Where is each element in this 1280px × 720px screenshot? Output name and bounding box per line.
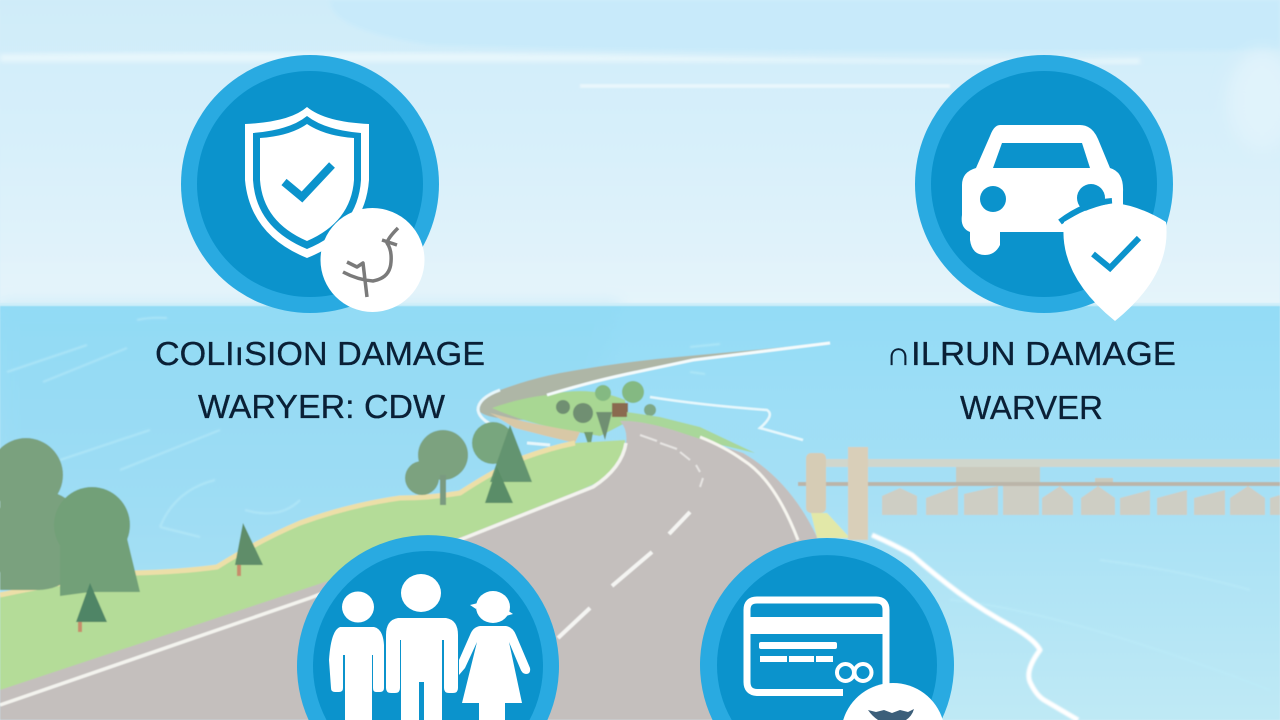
- circle: car with shield: [915, 55, 1173, 321]
- trees near the road: [405, 422, 532, 505]
- label: second damage waiver: [886, 335, 1176, 426]
- circle: people: [297, 535, 559, 720]
- road centre dashes: [558, 512, 690, 638]
- icon: three people: [329, 574, 530, 720]
- label: collision damage waiver: [155, 335, 485, 425]
- grass strip right of road: [627, 412, 755, 453]
- icon: credit card: [747, 600, 886, 692]
- sky: [0, 0, 1280, 305]
- label: second damage waiver: ∩ILRUN DAMAGE: [886, 335, 1176, 372]
- shoreline surf: [872, 535, 1078, 720]
- road: [0, 421, 835, 720]
- land on the left: [0, 440, 626, 705]
- icon: windshield crack badge: [320, 208, 424, 312]
- circle: collision damage shield: [181, 55, 439, 313]
- tree cluster on peninsula: [556, 381, 656, 450]
- label: collision damage waiver: WARYER: CDW: [198, 388, 446, 425]
- icon: shield badge: [1060, 201, 1167, 321]
- bridge: [798, 447, 1280, 540]
- icon: shield with check: [245, 107, 369, 258]
- circle: credit card: [700, 538, 954, 720]
- sea: [0, 303, 1280, 720]
- label: second damage waiver: WARVER: [960, 389, 1103, 426]
- large trees on the left: [0, 438, 263, 632]
- icon: bottom badge: [843, 683, 943, 720]
- distant peninsula: [478, 343, 830, 450]
- label: collision damage waiver: COLIıSION DAMAGE: [155, 335, 485, 372]
- icon: car: [962, 125, 1123, 255]
